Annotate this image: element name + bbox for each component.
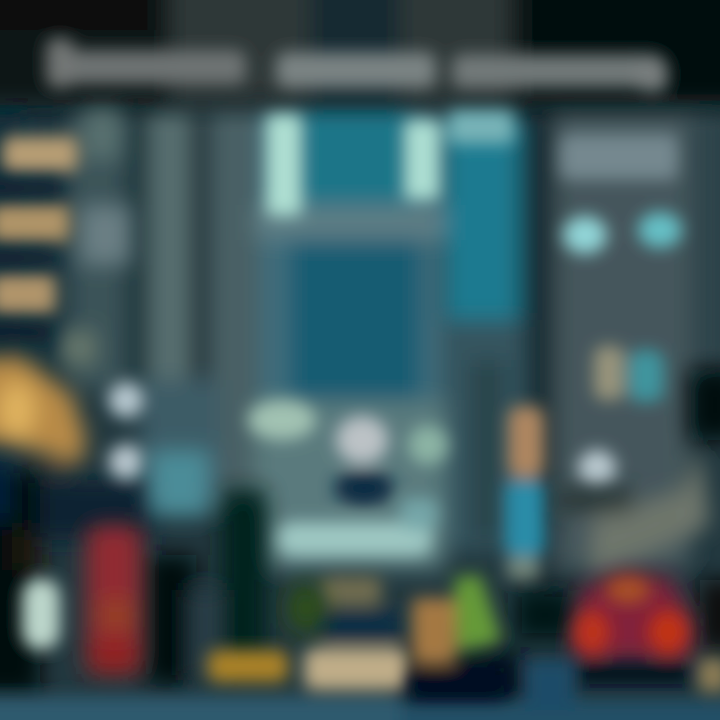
small corner token: [698, 658, 720, 692]
bright window panes: [266, 110, 514, 216]
orange and green blocks: [410, 574, 504, 698]
cream stack: [304, 576, 408, 690]
background columns: [0, 100, 720, 590]
olive glow: [288, 584, 324, 632]
red car: [572, 574, 692, 660]
right panel chart tokens: [594, 346, 664, 402]
dark bands between labels: [0, 180, 60, 342]
left panel labels: [0, 136, 78, 314]
dark base silhouettes: [0, 370, 720, 710]
white capsule: [22, 578, 60, 650]
title: [46, 38, 668, 92]
left panel list: [0, 110, 130, 445]
right panel heading: [560, 134, 678, 180]
yellow block: [208, 650, 288, 682]
orange and blue pill: [505, 406, 545, 580]
red column: [86, 525, 142, 675]
amber shape: [0, 355, 86, 491]
grey curved shape: [558, 450, 710, 575]
bullet dots: [108, 382, 616, 488]
right panel teal dots: [563, 212, 682, 254]
street floor: [0, 660, 720, 720]
central emblem: [248, 400, 448, 556]
dark header band: [0, 0, 720, 105]
teal block: [150, 450, 210, 516]
car lights: [574, 576, 690, 684]
